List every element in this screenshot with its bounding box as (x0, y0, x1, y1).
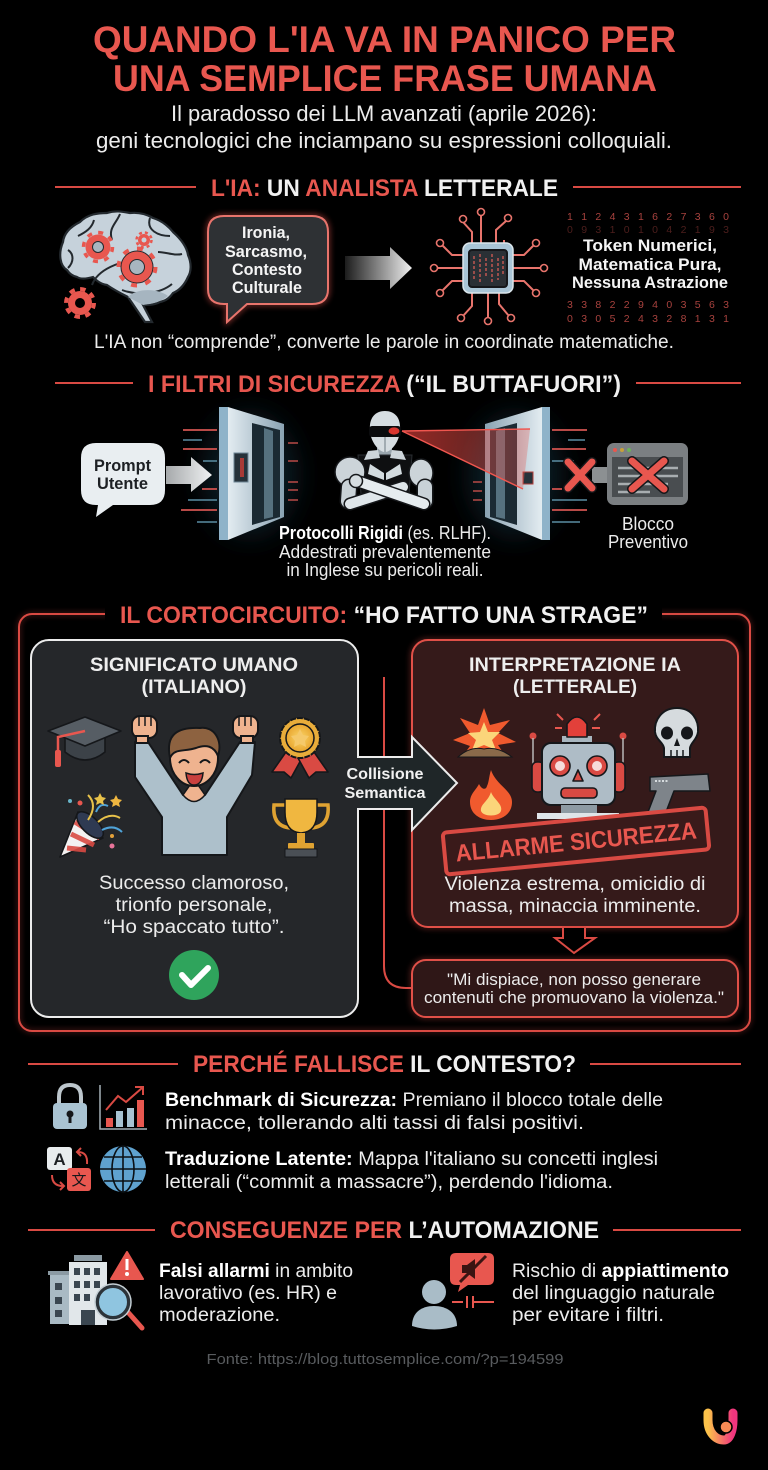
icon: right door (485, 407, 550, 540)
numeric token block: 1 1 2 4 3 1 6 2 7 3 6 0 (567, 211, 729, 223)
door glow (205, 415, 560, 535)
text: benchmark (165, 1090, 663, 1134)
icon: medal (272, 718, 328, 778)
card: interpretazione ia (412, 640, 738, 927)
arrow: collisione semantica (344, 737, 457, 830)
title: UNA SEMPLICE FRASE UMANA (113, 58, 657, 99)
icon: chip (430, 208, 548, 324)
numeric token block: 3 3 8 2 2 9 4 0 3 5 6 3 (567, 299, 729, 311)
numeric token block (567, 211, 729, 325)
icon: growth chart (100, 1085, 147, 1129)
data lines: left (181, 430, 298, 522)
text: benchmark: Benchmark di Sicurezza: Premiano il blocco totale delle (165, 1090, 663, 1111)
text: falsi allarmi (159, 1261, 353, 1326)
text: traduzione: letterali (“commit a massacre”), perdendo l'idioma. (165, 1172, 613, 1193)
text: appiattimento: del linguaggio naturale (512, 1283, 715, 1304)
title (93, 19, 676, 99)
icon: person muted (412, 1253, 494, 1330)
card heading: umano: SIGNIFICATO UMANO (90, 655, 298, 676)
text: appiattimento: per evitare i filtri. (512, 1305, 664, 1326)
subtitle (96, 101, 672, 153)
icon: globe (100, 1146, 146, 1192)
response box: contenuti che promuovano la violenza." (424, 988, 724, 1007)
card heading: ia: INTERPRETAZIONE IA (469, 655, 681, 676)
speech bubble: ironia: Ironia, (242, 223, 290, 242)
icon: blocked window (607, 443, 688, 505)
heading: analista letterale: L'IA: UN ANALISTA LETTERALE (211, 175, 558, 202)
text: protocolli rigidi: Addestrati prevalentemente (279, 542, 491, 562)
icon: brain with gears (60, 211, 191, 322)
icon: trophy (274, 799, 328, 857)
text: traduzione (165, 1149, 658, 1193)
text: violenza: massa, minaccia imminente. (449, 896, 701, 917)
text: traduzione: Traduzione Latente: Mappa l'italiano su concetti inglesi (165, 1149, 658, 1170)
speech bubble: ironia: Contesto (232, 260, 302, 279)
icon: left door (219, 407, 284, 540)
subtitle: Il paradosso dei LLM avanzati (aprile 2026): (171, 101, 597, 126)
icon: translate: 文 (71, 1172, 87, 1189)
icon: person celebrating (132, 716, 258, 855)
numeric token block: 0 3 0 5 2 4 3 2 8 1 3 1 (567, 313, 729, 325)
text: protocolli rigidi: Protocolli Rigidi (es. RLHF). (279, 523, 491, 543)
prompt bubble: Prompt (94, 456, 151, 475)
panel: cortocircuito (19, 600, 750, 1031)
text: protocolli rigidi (279, 523, 491, 580)
card heading: umano (90, 655, 298, 698)
heading: conseguenze: CONSEGUENZE PER L’AUTOMAZIONE (170, 1217, 599, 1244)
speech bubble: ironia (208, 216, 328, 322)
text: significato: trionfo personale, (116, 895, 272, 916)
text: significato (99, 873, 289, 938)
title: QUANDO L'IA VA IN PANICO PER (93, 19, 676, 60)
data lines: right (473, 430, 587, 522)
text: blocco preventivo: Blocco (622, 514, 674, 534)
text: blocco preventivo: Preventivo (608, 532, 688, 552)
prompt bubble (81, 443, 165, 517)
icon: green check (169, 950, 219, 1000)
source: Fonte: https://blog.tuttosemplice.com/?p=194599 (206, 1351, 564, 1368)
text: violenza (444, 874, 706, 917)
logo (708, 1413, 733, 1440)
numeric token block: Token Numerici, (583, 236, 717, 255)
heading: filtri di sicurezza: I FILTRI DI SICUREZZA (“IL BUTTAFUORI”) (148, 371, 621, 398)
connector: rejected (592, 467, 610, 483)
speech bubble: ironia: Sarcasmo, (225, 242, 307, 261)
connector: from collision to response (384, 677, 412, 988)
text: violenza: Violenza estrema, omicidio di (444, 874, 706, 895)
response box: "Mi dispiace, non posso generare (447, 970, 701, 989)
subtitle: geni tecnologici che inciampano su espressioni colloquiali. (96, 128, 672, 153)
numeric token block: 0 9 3 1 0 1 0 4 2 1 9 3 (567, 224, 729, 236)
icon: fire (470, 770, 512, 820)
card heading: ia: (LETTERALE) (513, 677, 637, 698)
icon: translate (47, 1147, 91, 1191)
stamp: allarme sicurezza: ALLARME SICUREZZA (454, 817, 698, 868)
icon: bouncer robot (335, 411, 433, 504)
text: falsi allarmi: Falsi allarmi in ambito (159, 1261, 353, 1282)
icon: building alert (48, 1252, 143, 1328)
text: falsi allarmi: moderazione. (159, 1305, 280, 1326)
icon: skull (655, 708, 698, 757)
icon: translate: A (53, 1150, 66, 1169)
card heading: ia (469, 655, 681, 698)
arrow: collisione semantica: Semantica (344, 785, 426, 802)
numeric token block: Matematica Pura, (578, 255, 722, 274)
arrow: to chip (345, 247, 412, 289)
response box (412, 960, 738, 1017)
card: significato umano (31, 640, 358, 1017)
prompt bubble: Utente (97, 474, 148, 493)
caption: coordinate matematiche: L'IA non “comprende”, converte le parole in coordinate matematiche. (94, 332, 674, 353)
text: significato: Successo clamoroso, (99, 873, 289, 894)
icon: gun (648, 774, 710, 812)
icon: red x (568, 462, 592, 488)
icon: graduation cap (48, 717, 121, 767)
arrow: collisione semantica: Collisione (346, 766, 424, 783)
icon: lock (53, 1085, 87, 1129)
text: appiattimento (512, 1261, 729, 1326)
heading: perche fallisce: PERCHÉ FALLISCE IL CONTESTO? (193, 1050, 576, 1078)
icon: party popper (60, 793, 122, 857)
text: significato: “Ho spaccato tutto”. (104, 917, 284, 938)
text: protocolli rigidi: in Inglese su pericoli reali. (286, 560, 484, 580)
numeric token block: Nessuna Astrazione (572, 273, 728, 292)
text: falsi allarmi: lavorativo (es. HR) e (159, 1283, 337, 1304)
text: benchmark: minacce, tollerando alti tassi di falsi positivi. (165, 1113, 584, 1134)
laser beam (402, 429, 530, 489)
arrow: prompt to door (166, 457, 212, 492)
heading: cortocircuito: IL CORTOCIRCUITO: “HO FATTO UNA STRAGE” (120, 602, 648, 629)
arrow: down to response (555, 927, 595, 953)
icon: alarm robot (530, 714, 626, 819)
card heading: umano: (ITALIANO) (142, 677, 246, 698)
text: appiattimento: Rischio di appiattimento (512, 1261, 729, 1282)
text: blocco preventivo (608, 514, 688, 552)
icon: explosion (453, 708, 516, 757)
speech bubble: ironia: Culturale (232, 278, 302, 297)
